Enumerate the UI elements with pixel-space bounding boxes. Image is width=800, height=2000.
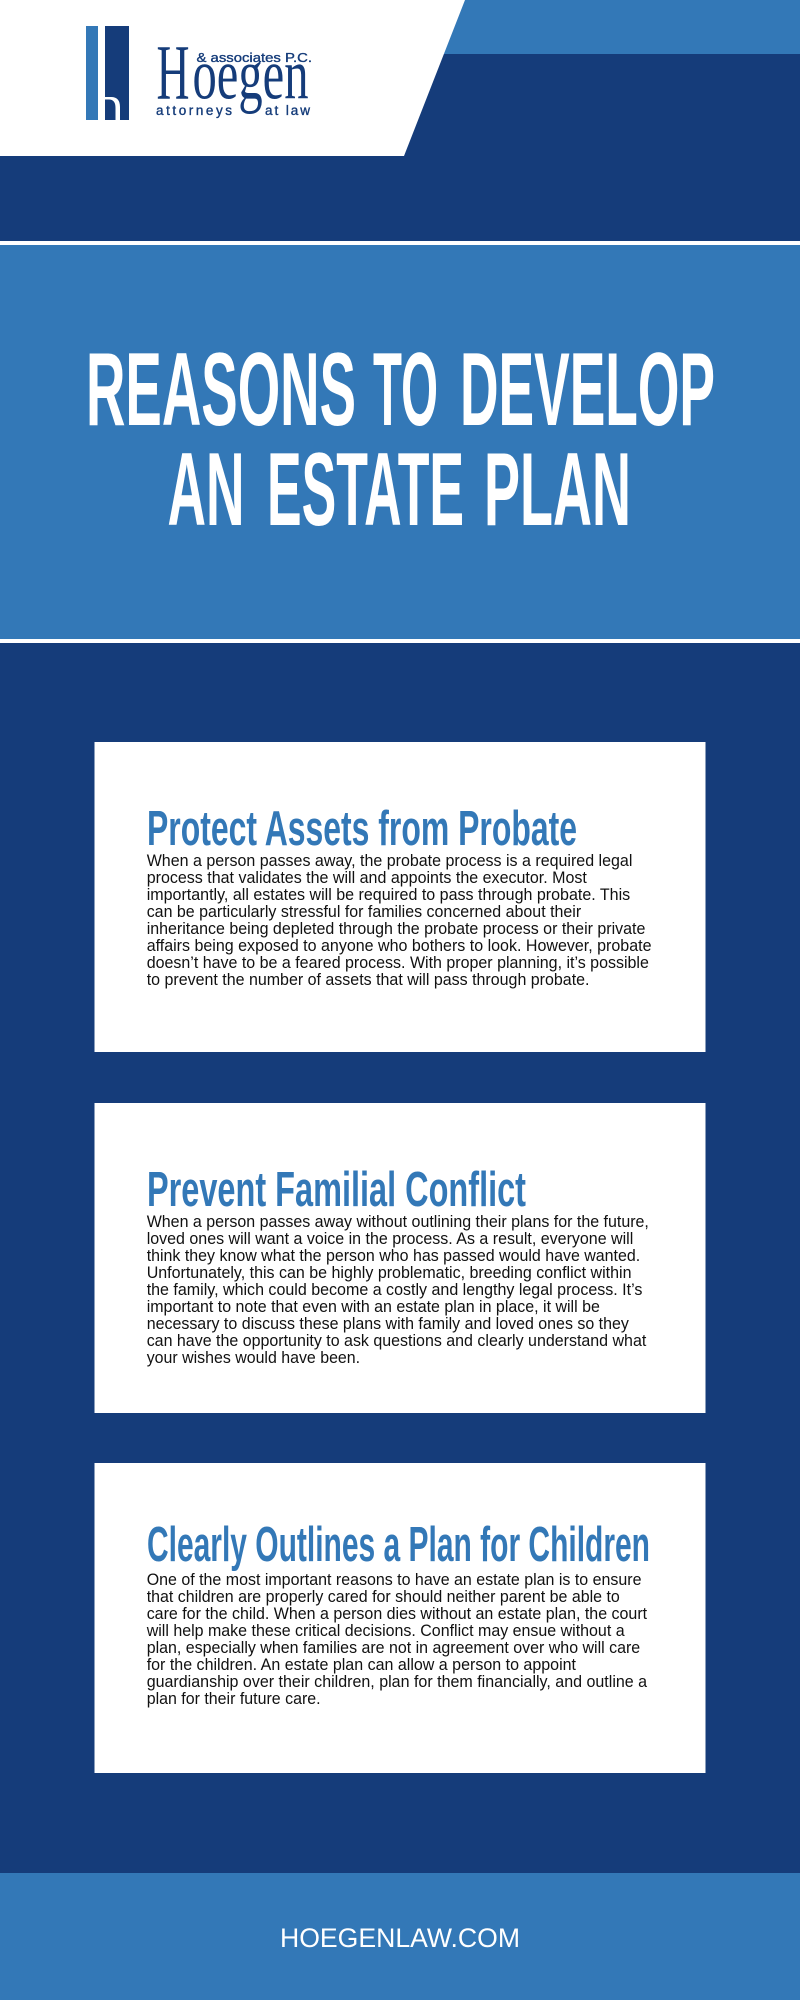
body text: plan, especially when families are not in agreement over who will care xyxy=(147,1639,640,1657)
body text: doesn’t have to be a feared process. With proper planning, it’s possible xyxy=(147,954,649,972)
footer band xyxy=(0,1873,800,2000)
title: REASONS xyxy=(86,332,356,448)
logo: Hoegen & Associates xyxy=(86,26,312,120)
body text: necessary to discuss these plans with family and loved ones so they xyxy=(147,1315,630,1333)
title xyxy=(86,332,715,548)
panel: protect assets from probate xyxy=(94,742,706,1052)
body text: affairs being exposed to anyone who bothers to look. However, probate xyxy=(147,937,651,955)
body text: that children are properly cared for should neither parent be able to xyxy=(147,1588,620,1606)
body text: think they know what the person who has passed would have wanted. xyxy=(147,1247,640,1265)
body text: When a person passes away without outlining their plans for the future, xyxy=(147,1213,649,1231)
body text: the family, which could become a costly and lengthy legal process. It’s xyxy=(147,1281,642,1299)
body text: important to note that even with an estate plan in place, it will be xyxy=(147,1298,600,1316)
logo wordmark xyxy=(156,28,308,116)
body text xyxy=(146,1571,648,1708)
logo: at law: at law xyxy=(265,103,310,118)
body text: for the children. An estate plan can allow a person to appoint xyxy=(147,1656,576,1674)
logo: and associates: & associates P.C. xyxy=(196,51,312,65)
logo: attorneys: attorneys xyxy=(156,103,232,118)
body text: to prevent the number of assets that will pass through probate. xyxy=(147,971,589,989)
title: ESTATE xyxy=(267,432,464,548)
heading: Prevent Familial Conflict xyxy=(147,1163,526,1217)
body text: inheritance being depleted through the probate process or their private xyxy=(147,920,645,938)
footer website: HOEGENLAW.COM xyxy=(280,1923,520,1953)
title: TO xyxy=(373,332,438,448)
body text: Unfortunately, this can be highly problematic, breeding conflict within xyxy=(147,1264,631,1282)
body text: One of the most important reasons to have an estate plan is to ensure xyxy=(147,1571,641,1589)
title: PLAN xyxy=(484,432,631,548)
body text xyxy=(147,1213,649,1367)
logo wordmark: H xyxy=(156,28,190,116)
body text: process that validates the will and appoints the executor. Most xyxy=(147,869,587,887)
body text xyxy=(147,852,651,989)
body text: plan for their future care. xyxy=(147,1690,321,1708)
panel: clearly outlines a plan for children xyxy=(94,1463,706,1773)
heading: Protect Assets from Probate xyxy=(147,802,577,856)
body text: care for the child. When a person dies without an estate plan, the court xyxy=(147,1605,648,1623)
title: AN xyxy=(168,432,244,548)
body text: can have the opportunity to ask questions and clearly understand what xyxy=(147,1332,647,1350)
body text: importantly, all estates will be required to pass through probate. This xyxy=(147,886,630,904)
body text: will help make these critical decisions. Conflict may ensue without a xyxy=(146,1622,625,1640)
body text: guardianship over their children, plan for them financially, and outline a xyxy=(147,1673,647,1691)
body text: loved ones will want a voice in the process. As a result, everyone will xyxy=(147,1230,633,1248)
logo wordmark: oegen xyxy=(192,34,308,114)
body text: your wishes would have been. xyxy=(147,1349,360,1367)
body text: When a person passes away, the probate process is a required legal xyxy=(147,852,632,870)
header white logo panel xyxy=(0,0,465,156)
title band xyxy=(0,241,800,643)
logo mark: light bar xyxy=(86,26,98,120)
header light blue band xyxy=(440,0,800,54)
panel: prevent familial conflict xyxy=(94,1103,706,1413)
body text: can be particularly stressful for families concerned about their xyxy=(147,903,582,921)
logo mark: dark bar with h xyxy=(105,26,129,120)
